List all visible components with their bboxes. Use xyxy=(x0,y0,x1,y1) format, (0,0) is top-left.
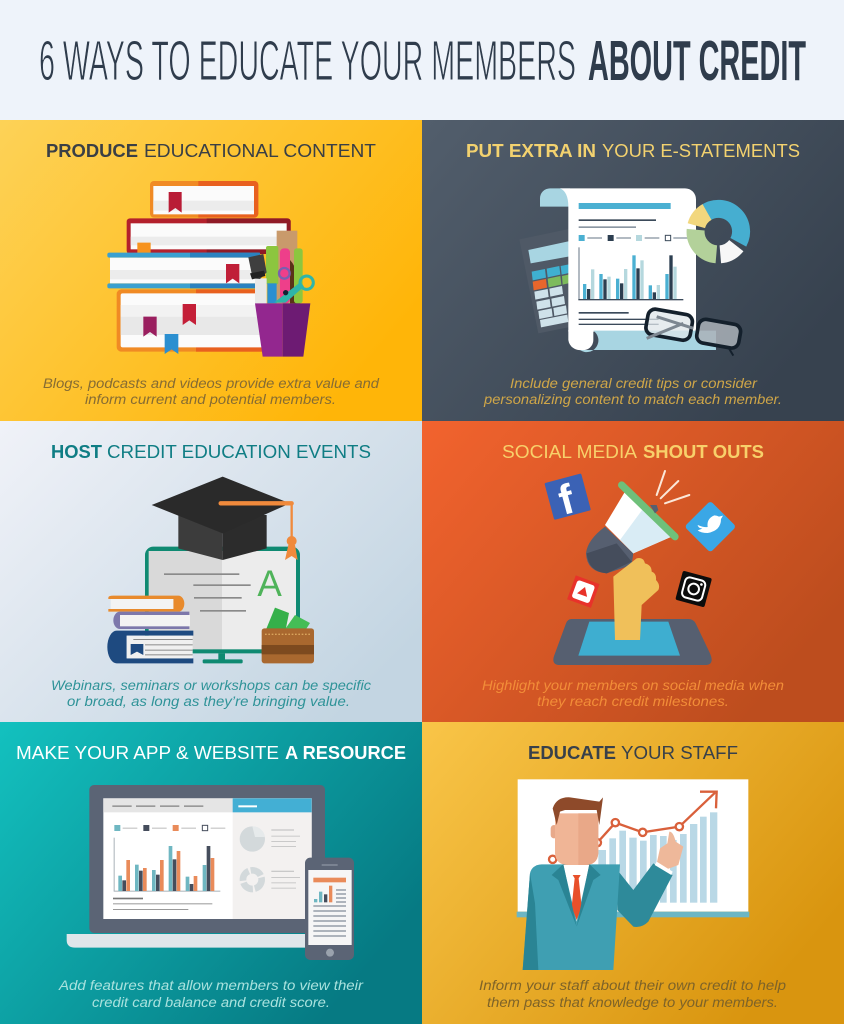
caption: educate your staff: them pass that knowledge to your members. xyxy=(487,995,778,1010)
icon: presenter pointing at growth chart xyxy=(517,779,749,970)
caption: put extra in your e-statements: Include general credit tips or consider xyxy=(510,376,758,391)
caption: social media shout outs xyxy=(482,678,784,709)
heading: put extra in your e-statements: YOUR E-STATEMENTS xyxy=(602,141,800,161)
heading: host credit education events: HOST xyxy=(51,442,102,462)
caption: produce educational content xyxy=(43,376,380,407)
heading: produce educational content: EDUCATIONAL CONTENT xyxy=(144,141,376,161)
caption: social media shout outs: Highlight your members on social media when xyxy=(482,678,784,693)
heading: make your app and website a resource xyxy=(16,743,406,763)
panel: produce educational content xyxy=(0,120,422,421)
icon: graduation cap, monitor, books and wallet xyxy=(107,477,314,663)
caption: host credit education events: or broad, as long as they’re bringing value. xyxy=(67,694,350,709)
caption: produce educational content: inform current and potential members. xyxy=(85,392,336,407)
heading: produce educational content xyxy=(46,141,376,161)
caption: host credit education events: Webinars, seminars or workshops can be specific xyxy=(51,678,371,693)
heading: social media shout outs: SHOUT OUTS xyxy=(643,442,764,462)
heading: social media shout outs: SOCIAL MEDIA xyxy=(502,442,637,462)
heading: put extra in your e-statements xyxy=(466,141,800,161)
caption: educate your staff xyxy=(479,978,787,1010)
heading: host credit education events: CREDIT EDUCATION EVENTS xyxy=(107,442,371,462)
panel: put extra in your e-statements xyxy=(422,120,844,421)
caption: host credit education events xyxy=(51,678,371,709)
heading: educate your staff: YOUR STAFF xyxy=(621,743,738,763)
panel: social media shout outs xyxy=(422,421,844,722)
heading: educate your staff xyxy=(528,743,738,763)
caption: social media shout outs: they reach credit milestones. xyxy=(537,694,729,709)
caption: put extra in your e-statements: personalizing content to match each member. xyxy=(483,392,782,407)
heading: put extra in your e-statements: PUT EXTRA IN xyxy=(466,141,596,161)
icon: stack of books with pencil pot xyxy=(107,181,313,357)
heading: produce educational content: PRODUCE xyxy=(46,141,138,161)
caption: make your app and website a resource xyxy=(58,978,364,1010)
heading: make your app and website a resource: MAKE YOUR APP & WEBSITE xyxy=(16,743,279,763)
caption: make your app and website a resource: Add features that allow members to view their xyxy=(58,978,364,993)
icon: graduation cap, monitor, books and wallet: A xyxy=(257,563,282,604)
heading: social media shout outs xyxy=(502,442,764,462)
caption: put extra in your e-statements xyxy=(483,376,782,407)
icon: statement document with calculator, pie and glasses xyxy=(519,188,742,356)
panel: educate your staff xyxy=(422,722,844,1024)
icon: megaphone, phone and social logos xyxy=(544,471,736,665)
panel: make your app and website a resource xyxy=(0,722,422,1024)
caption: educate your staff: Inform your staff about their own credit to help xyxy=(479,978,787,993)
icon: megaphone, phone and social logos: f xyxy=(553,475,579,524)
panel: host credit education events xyxy=(0,421,422,722)
caption: make your app and website a resource: credit card balance and credit score. xyxy=(92,995,330,1010)
icon: laptop and phone dashboard xyxy=(67,785,354,960)
heading: educate your staff: EDUCATE xyxy=(528,743,616,763)
caption: produce educational content: Blogs, podcasts and videos provide extra value and xyxy=(43,376,380,391)
heading: make your app and website a resource: A RESOURCE xyxy=(285,743,406,763)
